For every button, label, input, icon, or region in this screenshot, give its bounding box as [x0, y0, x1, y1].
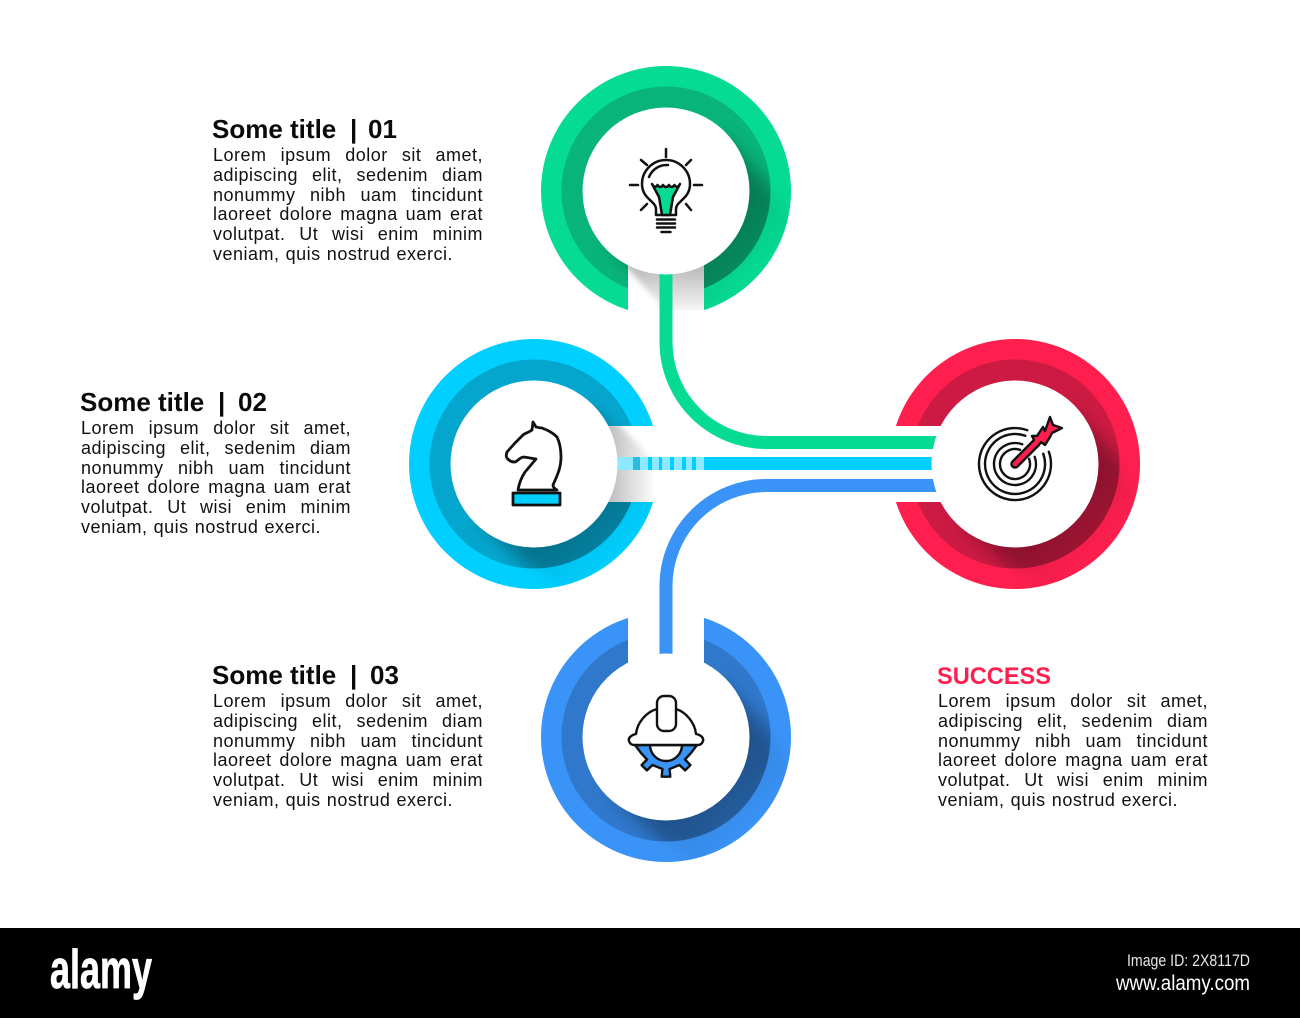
text block: success: adipiscing elit, sedenim diam [938, 711, 1208, 731]
icon: helmet with gear [629, 696, 703, 777]
connector: cyan line [610, 457, 945, 470]
ring: red success [896, 339, 1140, 589]
text block: step 03: nonummy nibh uam tincidunt [213, 731, 483, 751]
text block: success: veniam, quis nostrud exerci. [938, 790, 1178, 810]
icon: light bulb [630, 149, 702, 232]
text block: step 02 [81, 418, 351, 537]
white disc: success [932, 380, 1098, 548]
title: success: SUCCESS [937, 663, 1051, 690]
title: step 01: 01 [368, 114, 397, 144]
text block: step 01: veniam, quis nostrud exerci. [213, 244, 453, 264]
footer logo: alamy [50, 938, 152, 1000]
footer bar [0, 928, 1300, 1018]
title: step 02: Some title [80, 387, 204, 417]
text block: step 03: volutpat. Ut wisi enim minim [213, 770, 483, 790]
text block: step 03: adipiscing elit, sedenim diam [213, 711, 483, 731]
text block: step 03: Lorem ipsum dolor sit amet, [213, 691, 483, 711]
text block: success: laoreet dolore magna uam erat [938, 750, 1208, 770]
text block: success: nonummy nibh uam tincidunt [938, 731, 1208, 751]
text block: step 02: nonummy nibh uam tincidunt [81, 458, 351, 478]
title: step 02: | [218, 387, 225, 417]
text block: success [938, 691, 1208, 810]
text block: step 02: volutpat. Ut wisi enim minim [81, 497, 351, 517]
ring: blue step 03 [541, 618, 791, 862]
text block: step 02: adipiscing elit, sedenim diam [81, 438, 351, 458]
title: step 03: Some title [212, 660, 336, 690]
title: step 01: Some title [212, 114, 336, 144]
white disc: step 02 [450, 380, 618, 548]
text block: step 01: laoreet dolore magna uam erat [213, 204, 483, 224]
text block: step 03: laoreet dolore magna uam erat [213, 750, 483, 770]
text block: step 03: veniam, quis nostrud exerci. [213, 790, 453, 810]
title: step 01: | [350, 114, 357, 144]
text block: step 02: Lorem ipsum dolor sit amet, [81, 418, 351, 438]
ring: green step 01 [541, 66, 791, 310]
title: step 02: 02 [238, 387, 267, 417]
text block: step 01: volutpat. Ut wisi enim minim [213, 224, 483, 244]
icon: target with arrow [979, 417, 1062, 500]
connector: green line [666, 270, 945, 442]
text block: step 02: veniam, quis nostrud exerci. [81, 517, 321, 537]
text block: step 01: nonummy nibh uam tincidunt [213, 185, 483, 205]
title: step 03: | [350, 660, 357, 690]
text block: step 02: laoreet dolore magna uam erat [81, 477, 351, 497]
footer image id: Image ID: 2X8117D [1127, 951, 1250, 970]
text block: step 01: Lorem ipsum dolor sit amet, [213, 145, 483, 165]
text block: step 01 [213, 145, 483, 264]
ring: cyan step 02 [409, 339, 653, 589]
title: step 03: 03 [370, 660, 399, 690]
text block: success: Lorem ipsum dolor sit amet, [938, 691, 1208, 711]
text block: step 01: adipiscing elit, sedenim diam [213, 165, 483, 185]
connector: blue line [666, 486, 945, 660]
text block: step 03 [213, 691, 483, 810]
text block: success: volutpat. Ut wisi enim minim [938, 770, 1208, 790]
footer url: www.alamy.com [1115, 972, 1250, 995]
icon: chess knight [506, 422, 561, 505]
white disc: step 03 [582, 654, 750, 820]
white disc: step 01 [582, 108, 750, 274]
